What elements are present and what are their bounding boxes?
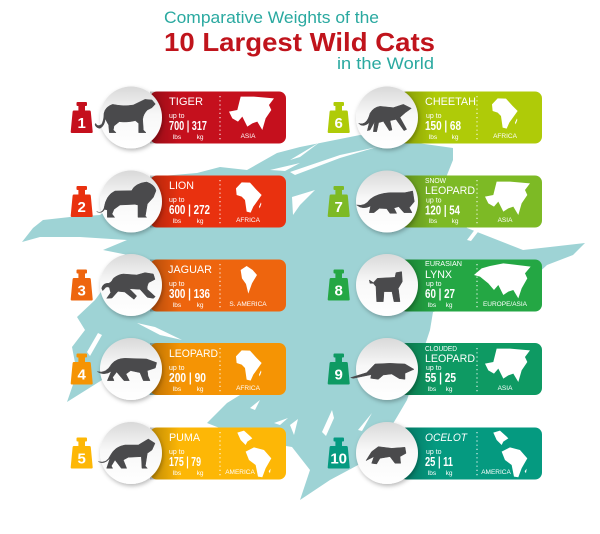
leopard silhouette [97, 358, 157, 381]
clouded leopard silhouette [351, 363, 414, 379]
region label: AFRICA [493, 133, 518, 140]
weight: lbs [173, 302, 182, 309]
disc [356, 422, 418, 484]
weight: kg [197, 386, 204, 393]
name: PUMA [169, 432, 201, 444]
weight: up to [169, 449, 185, 456]
card [400, 260, 542, 312]
region label: ASIA [498, 385, 513, 392]
weight: lbs [173, 134, 182, 141]
disc [100, 170, 162, 232]
panel: snow leopard [328, 170, 542, 232]
panel: eurasian lynx [328, 254, 542, 316]
rank weight icon 8 [328, 270, 350, 300]
panel: ocelot [328, 422, 542, 484]
rank weight icon 1 [71, 102, 93, 133]
weight: 150 | 68 [425, 118, 461, 133]
jaguar silhouette [102, 273, 155, 299]
weight: 25 | 11 [425, 454, 453, 469]
card [150, 428, 286, 480]
map: Asia [229, 97, 274, 130]
weight: up to [169, 365, 185, 372]
snow leopard silhouette [357, 191, 414, 213]
rank weight icon 6 [328, 102, 350, 133]
weight: kg [452, 218, 459, 225]
name: LION [169, 180, 194, 192]
rank weight icon 1: 1 [78, 115, 86, 132]
region label: S. AMERICA [229, 301, 267, 308]
panel: cheetah [328, 86, 542, 148]
name: SNOW [425, 178, 446, 185]
weight: lbs [429, 134, 438, 141]
card [150, 176, 286, 228]
rank weight icon 2 [71, 186, 93, 217]
card [400, 176, 542, 228]
map: Asia [485, 349, 530, 382]
card [150, 260, 286, 312]
name: LEOPARD [425, 353, 475, 365]
card [150, 343, 286, 395]
weight [425, 365, 456, 393]
rank weight icon 9: 9 [335, 366, 343, 384]
weight: up to [426, 449, 442, 456]
map: South America [241, 266, 257, 294]
rank weight icon 3: 3 [78, 282, 86, 300]
puma silhouette [98, 439, 155, 468]
region label: AMERICA [481, 469, 511, 476]
background brush stroke [22, 135, 585, 500]
name [425, 178, 475, 197]
map: Africa [236, 350, 262, 381]
region label: AFRICA [236, 217, 261, 224]
map: Africa [492, 98, 518, 129]
name: CHEETAH [425, 96, 476, 108]
weight [169, 449, 204, 477]
rank weight icon 6: 6 [335, 115, 343, 132]
lynx silhouette [369, 272, 402, 302]
weight: 700 | 317 [169, 118, 207, 133]
name [425, 346, 475, 365]
cheetah silhouette [359, 104, 411, 132]
rank weight icon 10: 10 [330, 450, 347, 468]
weight: kg [446, 302, 453, 309]
map: Asia [485, 182, 530, 215]
card [400, 92, 542, 144]
disc [100, 86, 162, 148]
name [425, 261, 462, 281]
weight: kg [452, 134, 459, 141]
weight: lbs [173, 470, 182, 477]
weight: lbs [428, 470, 437, 477]
map: Europe and Asia [474, 263, 531, 298]
brush white streaks [87, 142, 506, 436]
name: TIGER [169, 96, 203, 108]
rank weight icon 10 [328, 438, 350, 468]
region label: ASIA [241, 133, 256, 140]
weight: up to [426, 113, 442, 120]
panel: puma [71, 422, 286, 484]
map: America [237, 431, 271, 477]
weight: lbs [173, 386, 182, 393]
title line 2: 10 Largest Wild Cats [164, 27, 435, 57]
weight: kg [197, 218, 204, 225]
title line 3: in the World [337, 55, 434, 73]
weight: up to [426, 198, 442, 204]
title line 1: Comparative Weights of the [164, 9, 379, 27]
weight [169, 365, 206, 393]
disc [356, 254, 418, 316]
weight: 60 | 27 [425, 286, 455, 301]
disc [100, 254, 162, 316]
disc [100, 338, 162, 400]
name: LYNX [425, 269, 453, 281]
weight: kg [446, 470, 453, 477]
name: LEOPARD [169, 348, 218, 360]
weight: lbs [429, 218, 438, 225]
weight [169, 197, 210, 225]
weight: up to [169, 281, 185, 288]
weight [425, 113, 461, 141]
panel: lion [71, 170, 286, 232]
map: America [493, 431, 527, 477]
name: EURASIAN [425, 261, 462, 268]
disc [356, 338, 418, 400]
weight: kg [197, 134, 204, 141]
rank weight icon 5: 5 [78, 450, 86, 468]
rank weight icon 4 [71, 354, 93, 384]
weight: lbs [428, 302, 437, 309]
weight [425, 198, 461, 225]
weight: lbs [428, 386, 437, 393]
weight: 200 | 90 [169, 370, 206, 385]
panel: clouded leopard [328, 338, 542, 400]
region label: ASIA [498, 217, 513, 224]
panel: tiger [71, 86, 286, 148]
rank weight icon 4: 4 [78, 366, 87, 384]
region label: EUROPE/ASIA [483, 301, 528, 308]
weight [425, 449, 453, 477]
disc [356, 170, 418, 232]
weight: up to [426, 365, 442, 372]
card [400, 343, 542, 395]
tiger silhouette [95, 99, 155, 133]
weight [425, 281, 455, 309]
weight: up to [169, 113, 185, 120]
card [150, 92, 286, 144]
rank weight icon 2: 2 [78, 199, 86, 216]
ocelot silhouette [366, 447, 406, 464]
map: Africa [236, 182, 262, 213]
weight: up to [169, 197, 185, 204]
rank weight icon 8: 8 [335, 282, 343, 300]
panel: jaguar [71, 254, 286, 316]
weight: 175 | 79 [169, 454, 201, 469]
rank weight icon 7: 7 [335, 199, 343, 216]
weight: 600 | 272 [169, 202, 210, 217]
weight [169, 281, 210, 309]
rank weight icon 7 [328, 186, 350, 217]
rank weight icon 9 [328, 354, 350, 384]
rank weight icon 3 [71, 270, 93, 300]
name: JAGUAR [168, 264, 212, 276]
region label: AFRICA [236, 385, 261, 392]
lion silhouette [97, 182, 156, 217]
disc [356, 86, 418, 148]
card [400, 428, 542, 480]
weight: kg [197, 302, 204, 309]
title [164, 9, 435, 73]
weight: kg [446, 386, 453, 393]
panel: leopard [71, 338, 286, 400]
weight: lbs [173, 218, 182, 225]
rank weight icon 5 [71, 438, 93, 468]
name: OCELOT [425, 432, 468, 444]
weight: 55 | 25 [425, 370, 456, 385]
weight: kg [197, 470, 204, 477]
weight: 300 | 136 [169, 286, 210, 301]
region label: AMERICA [225, 469, 255, 476]
name: CLOUDED [425, 346, 457, 353]
weight: 120 | 54 [425, 202, 461, 218]
weight: up to [426, 281, 442, 288]
name: LEOPARD [425, 185, 475, 197]
disc [100, 422, 162, 484]
weight [169, 113, 207, 141]
